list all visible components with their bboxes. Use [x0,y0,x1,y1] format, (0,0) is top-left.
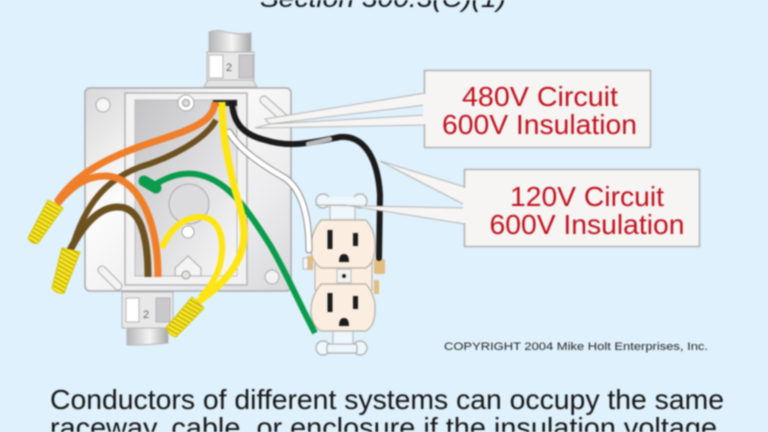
icon: metal junction box [85,88,291,291]
callout: 480V circuit: 480V Circuit [462,81,618,112]
callout: 120V circuit: 120V Circuit [510,181,664,212]
icon: bottom conduit connector: 2 [143,309,149,321]
icon: top conduit connector [204,30,257,87]
wire: long orange [57,102,215,202]
icon: wire nut, orange [28,200,63,243]
wire: green ground [144,174,315,333]
icon: bottom conduit connector [122,292,173,345]
wire: looped brown [70,207,148,277]
wire: long brown [72,120,216,248]
callout: 480V circuit: 600V Insulation [442,109,637,140]
wire: long yellow [198,102,244,302]
callout: 120V circuit: 600V Insulation [490,209,684,240]
icon: duplex receptacle [303,194,385,355]
body text [50,384,724,432]
wire: white [229,132,309,250]
icon: top conduit connector: 2 [226,62,232,74]
icon: wire nut, yellow [166,297,204,337]
callout: 120V circuit [315,161,700,246]
copyright note: COPYRIGHT 2004 Mike Holt Enterprises, Inc. [444,341,708,353]
wire: looped orange [57,176,158,277]
body text: Conductors of different systems can occupy the same [50,384,724,415]
callout: 480V circuit [255,70,650,148]
wire: yellow loop [162,217,222,298]
icon: wire nut, brown [52,248,80,293]
wire: black [232,104,380,258]
